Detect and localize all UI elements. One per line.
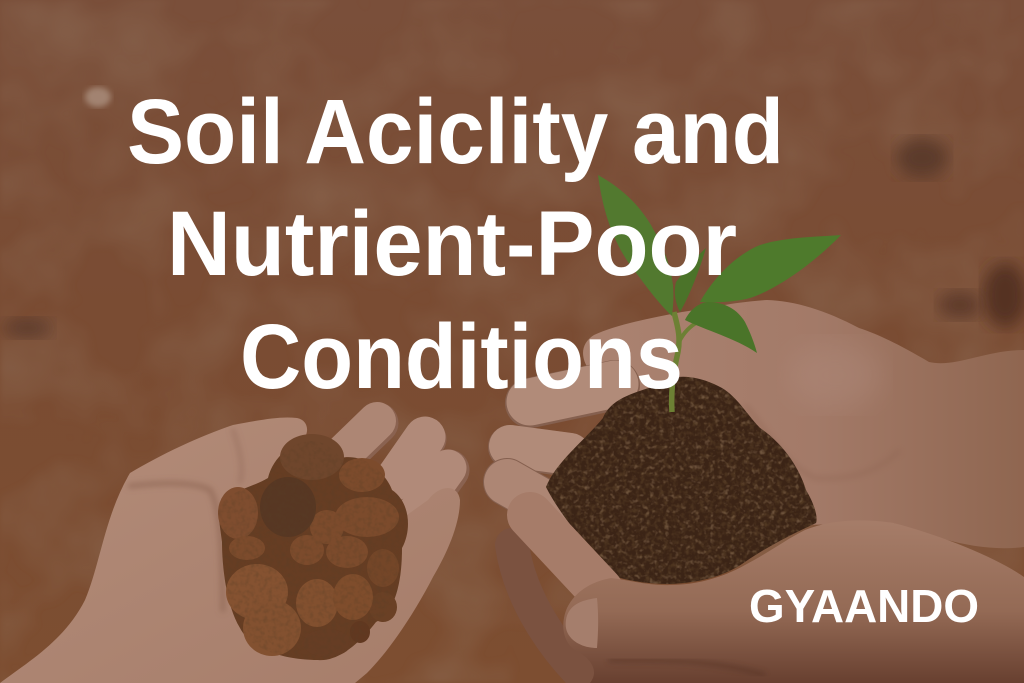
finger C (507, 482, 565, 515)
palm creases (130, 430, 242, 610)
lower finger (512, 545, 590, 683)
soil mound: fertile soil (546, 377, 817, 584)
branch (679, 322, 698, 342)
leaf: small centre (675, 248, 706, 312)
leaf: lower right (685, 302, 757, 353)
title: Soil Aciclity and (127, 81, 784, 183)
leaf: right (700, 235, 841, 302)
soil clump: acidic soil (218, 434, 408, 660)
title: Nutrient-Poor (167, 193, 737, 295)
thumb crease (608, 660, 765, 675)
finger D (530, 515, 600, 590)
title (127, 81, 784, 408)
hand: left palm and thumb (0, 417, 460, 683)
finger A (530, 385, 615, 403)
hand: lower right (563, 520, 1024, 683)
left hand holding acidic soil (0, 417, 460, 683)
thumbnail (566, 598, 598, 648)
fingers (345, 421, 377, 452)
palm shadow (745, 405, 900, 478)
title: Conditions (240, 306, 683, 408)
hand: upper right (583, 300, 1024, 548)
brand name: GYAANDO (749, 580, 979, 632)
palm highlight (787, 341, 883, 409)
finger shadows (346, 423, 449, 520)
leaf: tall left (598, 175, 673, 316)
right hands holding fertile soil (507, 300, 1024, 683)
finger B (510, 447, 570, 455)
seedling (598, 175, 841, 412)
stem (672, 312, 679, 412)
